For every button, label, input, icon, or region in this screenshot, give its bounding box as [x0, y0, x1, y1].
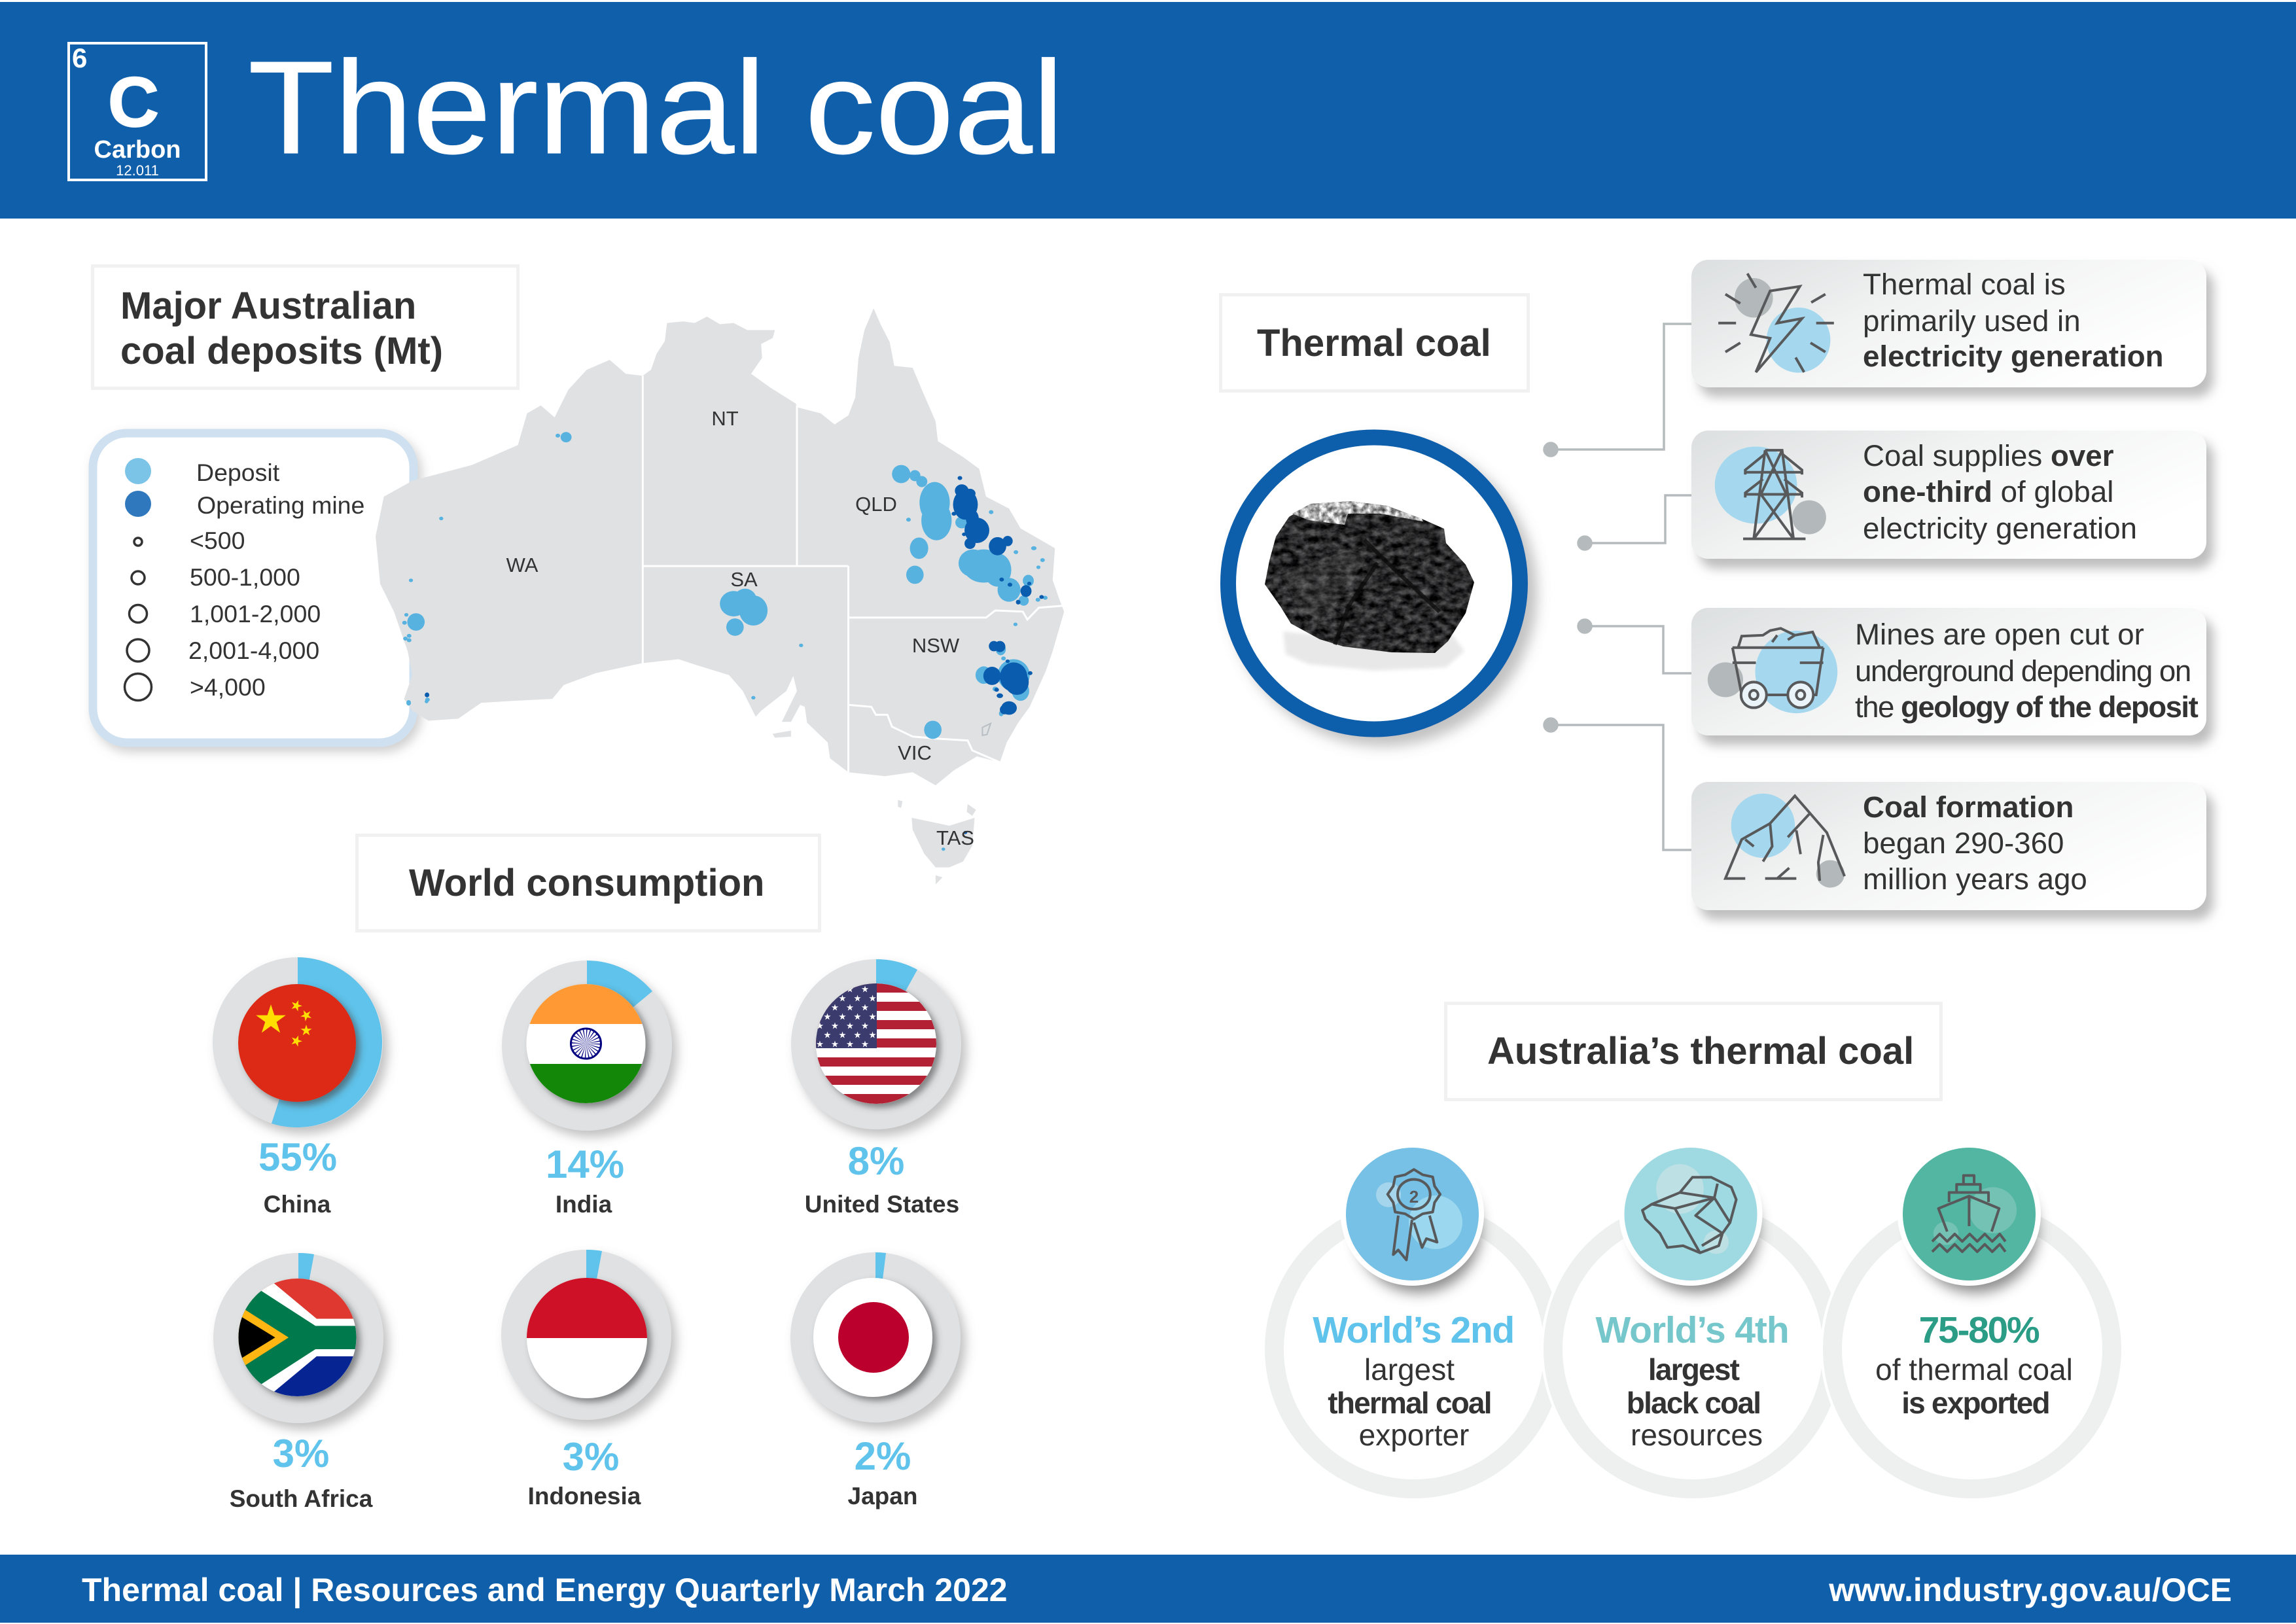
stat: 75-80% exported: is exported	[1901, 1386, 2049, 1420]
card: open cut or underground: Mines are open cut or	[1855, 618, 2144, 651]
map of Australia with coal deposits: VIC	[898, 741, 932, 764]
legend panel: <500	[190, 527, 245, 554]
carbon element tile: Carbon	[94, 136, 181, 164]
card: coal formation: Coal formation	[1863, 790, 2074, 824]
stat: world's 4th: black coal	[1627, 1386, 1760, 1420]
stat: 75-80% exported: 75-80%	[1919, 1309, 2040, 1351]
header band	[0, 2, 2296, 219]
stat: world's 4th	[1553, 1142, 1832, 1489]
icon: rosette: 2	[1409, 1187, 1419, 1207]
card: electricity generation: Thermal coal is	[1863, 268, 2066, 301]
map of Australia with coal deposits: NSW	[912, 634, 960, 657]
card: electricity generation: electricity generation	[1863, 340, 2164, 373]
stat: world's 2nd: exporter	[1359, 1418, 1469, 1452]
heading: major Australian coal deposits: Major Australian	[120, 285, 416, 327]
legend panel	[93, 433, 414, 743]
footer band	[0, 1555, 2296, 1623]
icon: rosette	[1376, 1169, 1462, 1260]
carbon element tile: 6	[72, 43, 87, 73]
card: open cut or underground: geology of the deposit	[1901, 690, 2199, 724]
donut: South Africa 3%: South Africa	[230, 1485, 373, 1512]
legend panel: Deposit	[196, 459, 280, 486]
card: one-third of global electricity	[1691, 431, 2206, 559]
heading: thermal coal	[1221, 294, 1528, 391]
donut: Japan 2%	[790, 1252, 961, 1509]
stat: world's 4th: World’s 4th	[1595, 1309, 1789, 1351]
card: one-third of global electricity: Coal supplies	[1863, 439, 2051, 472]
icon: mine cart	[1708, 628, 1837, 713]
donut: Indonesia 3%: 3%	[563, 1435, 619, 1479]
coal photo in ring	[1228, 437, 1520, 729]
heading: thermal coal: Thermal coal	[1257, 322, 1491, 364]
stat: world's 4th: resources	[1631, 1418, 1763, 1452]
legend panel: >4,000	[190, 673, 266, 701]
heading: major Australian coal deposits: coal deposits (Mt)	[120, 330, 443, 372]
icon: coal rock	[1642, 1164, 1737, 1254]
card: electricity generation	[1691, 260, 2206, 387]
donut: India 14%: 14%	[546, 1142, 624, 1186]
stat: 75-80% exported: of thermal coal	[1875, 1352, 2073, 1386]
card: one-third of global electricity: one-third	[1863, 475, 1992, 508]
heading: Australia's thermal coal: Australia’s thermal coal	[1487, 1030, 1914, 1072]
stat: 75-80% exported	[1832, 1142, 2112, 1489]
carbon element tile: C	[108, 62, 159, 141]
donut: China 55%: 55%	[258, 1135, 337, 1179]
map of Australia with coal deposits: NT	[711, 407, 739, 430]
card: open cut or underground: the	[1855, 690, 1901, 724]
donut: Japan 2%: 2%	[855, 1434, 911, 1478]
stat: world's 4th: largest	[1648, 1352, 1740, 1386]
title: Thermal coal	[248, 34, 1064, 181]
card: coal formation: began 290-360	[1863, 826, 2064, 860]
map of Australia with coal deposits: SA	[730, 568, 758, 591]
donut: China 55%: China	[264, 1191, 331, 1218]
donut: South Africa 3%	[213, 1253, 383, 1512]
donut: United States 8%: 8%	[848, 1139, 904, 1183]
legend panel: 1,001-2,000	[190, 600, 321, 627]
card: coal formation: million years ago	[1863, 862, 2087, 896]
heading: Australia's thermal coal	[1446, 1004, 1941, 1099]
icon: lightning	[1718, 274, 1834, 373]
donut: United States 8%: United States	[805, 1191, 959, 1218]
connector lines	[1544, 324, 1691, 850]
stat: world's 2nd: thermal coal	[1328, 1386, 1491, 1420]
map of Australia with coal deposits: WA	[506, 554, 539, 576]
card: open cut or underground	[1691, 608, 2206, 735]
icon: transmission tower	[1715, 447, 1826, 539]
donut: South Africa 3%: 3%	[273, 1432, 329, 1475]
donut: Indonesia 3%: Indonesia	[528, 1483, 641, 1509]
map of Australia with coal deposits: QLD	[855, 493, 897, 516]
card: one-third of global electricity: of global	[1992, 475, 2113, 508]
map of Australia with coal deposits	[376, 308, 1064, 885]
donut: India 14%	[502, 961, 672, 1218]
legend panel: 500-1,000	[190, 563, 300, 591]
legend panel: 2,001-4,000	[188, 637, 319, 664]
donut: Japan 2%: Japan	[848, 1483, 917, 1509]
card: open cut or underground: underground depending on	[1855, 654, 2191, 688]
map of Australia with coal deposits: TAS	[936, 826, 974, 849]
stat: world's 2nd: largest	[1364, 1352, 1455, 1386]
donut: China 55%	[213, 957, 383, 1218]
carbon element tile	[69, 43, 206, 180]
card: electricity generation: primarily used in	[1863, 304, 2081, 338]
heading: world consumption	[357, 835, 819, 930]
icon: mountain	[1725, 794, 1845, 888]
footer band: Thermal coal | Resources and Energy Quarterly March 2022	[82, 1572, 1008, 1609]
footer band: www.industry.gov.au/OCE	[1828, 1572, 2232, 1608]
stat: world's 2nd: World’s 2nd	[1313, 1309, 1514, 1351]
donut: Indonesia 3%	[501, 1250, 671, 1509]
card: coal formation	[1691, 782, 2206, 910]
card: one-third of global electricity: electricity generation	[1863, 512, 2137, 545]
donut: United States 8%	[791, 959, 961, 1218]
stat: world's 2nd	[1275, 1142, 1553, 1489]
carbon element tile: 12.011	[116, 162, 159, 179]
heading: world consumption: World consumption	[409, 862, 764, 904]
legend panel: Operating mine	[197, 491, 364, 519]
icon: ship	[1932, 1176, 2017, 1252]
heading: major Australian coal deposits	[93, 266, 518, 389]
donut: India 14%: India	[556, 1191, 612, 1218]
card: one-third of global electricity: over	[2051, 439, 2114, 472]
